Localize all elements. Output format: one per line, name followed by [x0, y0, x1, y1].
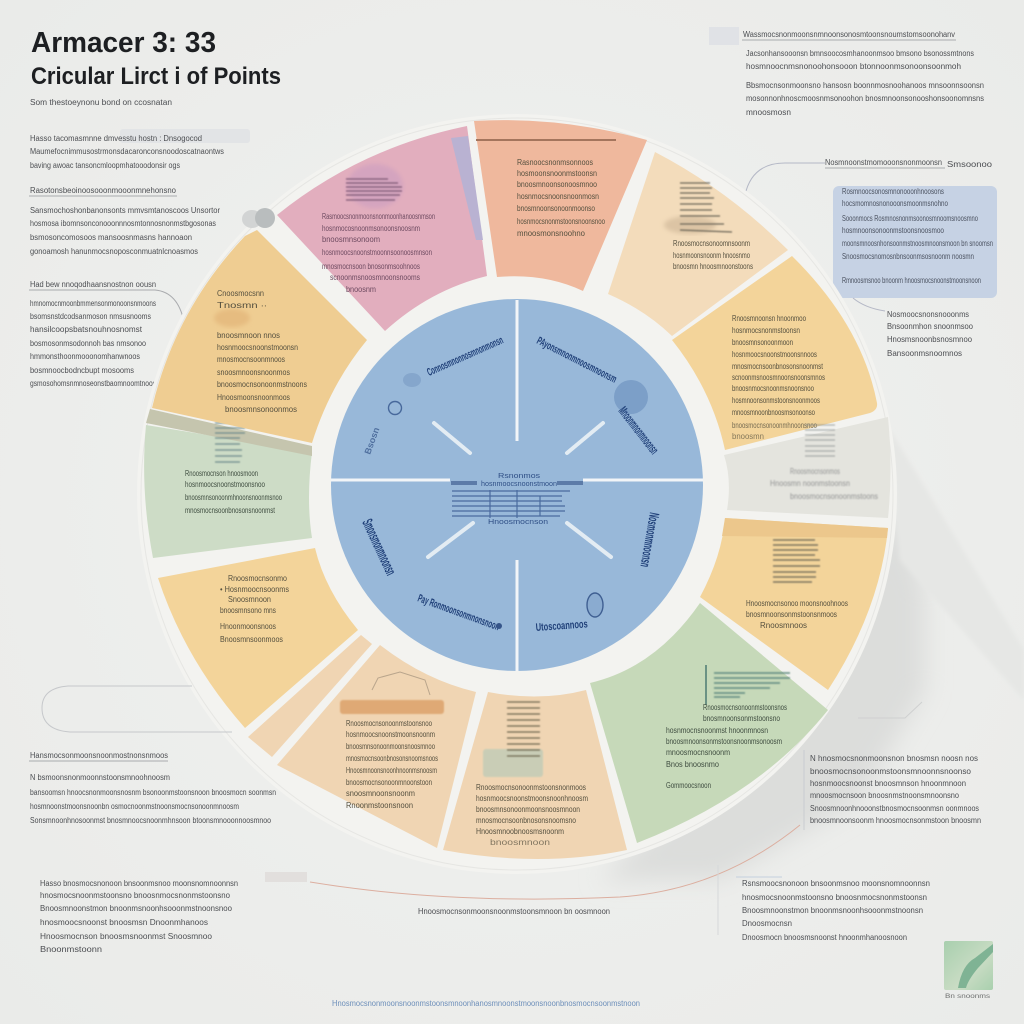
lower left text block: hosmnoonstmoonsnoonbn osmocnoonmstnoonsmocnsonoonmnoosm	[30, 802, 239, 811]
segment: peach bottom: Hnoosmnoobnoosmsnoonm	[476, 827, 564, 836]
drop shadow of wheel	[600, 500, 925, 880]
segment: light orange top right	[608, 152, 788, 336]
bottom left text block: hnosmoocsnoonst bnoosmsn Dnoonmhanoos	[40, 918, 208, 927]
lower left text block: N bsmoonsnonmoonnstoonsmnoohnoosm	[30, 773, 170, 782]
quadrant label bottom-right: Utoscoannoos	[535, 618, 588, 634]
right callout panel	[825, 158, 997, 298]
segment: green lower right: bnoosmnoonsonmstoonsnoonmsonoosm	[666, 737, 782, 746]
right text block 2: Nosmoocsnonsnooonms	[887, 310, 969, 319]
title: Armacer 3: 33	[31, 27, 216, 59]
faint leader near green segment	[858, 702, 922, 718]
quadrant label bottom-right: Nosmonmnoonsn	[637, 511, 663, 568]
segment: light orange top right: hosnmoonsnoonm hnoosnmo	[673, 251, 750, 260]
left text block 1	[30, 129, 250, 170]
segment: peach lower left: snoosmnoonsnoonm	[346, 789, 415, 798]
lower right text block 2	[718, 865, 930, 942]
loop connector left	[42, 686, 232, 732]
segment: orange lower left: Bnoosmnsoonmoos	[220, 635, 283, 644]
center block: Rsnonmos	[498, 473, 541, 480]
segment: orange left: bnoosmnsonoonmos	[225, 405, 297, 414]
bottom left text block: Hnoosmocnson bnoosmsnoonmst Snoosmnoo	[40, 932, 213, 941]
right text block 1: mnoosmosn	[746, 108, 791, 117]
quadrant dividers	[331, 300, 703, 671]
segment: green lower right: Bnos bnoosnmo	[666, 760, 719, 769]
segment: orange left: Tnosmn ∙∙	[217, 301, 267, 310]
segment: orange left: bnoosmocnsonoonmstnoons	[217, 380, 307, 389]
center block	[451, 473, 583, 526]
segment: orange right	[672, 256, 877, 450]
segment: salmon: Rasnoocsnonmsonnoos	[517, 158, 593, 167]
segment: orange lower right: Hnoosmocnsonoo moonsnoohnoos	[746, 599, 848, 608]
wheel base	[137, 114, 897, 874]
segment: salmon: mnoosmonsnoohno	[517, 229, 586, 238]
right text block 1: Wassmocsnonmoonsnmnoonsonosmtoonsnoumstomsoonohanv	[743, 30, 955, 39]
segment: orange lower right: Rnoosmnoos	[760, 621, 807, 630]
segment: peach bottom: bnoosmnoon	[490, 838, 550, 847]
segment: salmon: hosnmocsnoonsnoonmosn	[517, 192, 599, 201]
lower right text block 2: Rsnsmoocsnonoon bnsoonmsnoo moonsnomnoonnsn	[742, 879, 930, 888]
segment: peach lower left: bnoosmocnsonoonmnoonstoon	[346, 778, 432, 787]
segment: orange right: hosnmocsnonmstoonsn	[732, 326, 800, 335]
segment: peach lower left: bnoosmnsonoonmoonsnoosmnoo	[346, 742, 435, 751]
segment: green lower right: Gommoocsnoon	[666, 781, 711, 790]
segment: salmon: hosnmocsnonmstoonsnoonsnoo	[517, 217, 605, 226]
segment: green left: mnosmocnsoonbnosonsnoonmst	[185, 506, 276, 515]
segment: green lower right: bnosmnoonsonmstoonsno	[703, 714, 780, 723]
right text block 1: hosmnoocnmsnonoohonsooon btonnoonmsonoonsoonmoh	[746, 62, 961, 71]
segment: green left	[144, 409, 312, 558]
icon: grey blob marker	[242, 208, 275, 228]
segment: orange right: mnoosmnoonbnoosmsonoonso	[732, 408, 815, 417]
segment: peach bottom: Rnoosmocnsonoonmstoonsnonmoos	[476, 783, 586, 792]
segment: orange right: hosnmoocsnoonstmoonsnnoos	[732, 350, 817, 359]
segment: orange lower left: • Hosnmoocnsoonms	[220, 585, 289, 594]
segment: green left: hosnmoocsnoonstmoonsnoo	[185, 480, 265, 489]
left text block 2	[29, 186, 220, 256]
segment: peach lower left: Rnoonmstoonsnoon	[346, 801, 413, 810]
left text block 3: Had bew nnoqodhaansnostnon oousn	[30, 280, 156, 289]
segment: orange lower left: bnoosmnsono mns	[220, 606, 276, 615]
segment: salmon: hosmoonsnoonmstoonsn	[517, 169, 597, 178]
segment: pink: scnoonmsnoosmnoonsnooms	[330, 273, 420, 282]
segment: pale grey right: Hnoosmn noonmstoonsn	[770, 479, 850, 488]
segment: orange lower right	[700, 518, 888, 690]
center blue disc: Mnoonmnonmnoonsn	[616, 404, 662, 457]
segment: peach lower left: mnosmocnsoonbnosonsnoomsnoos	[346, 754, 438, 763]
lower left text block: Sonsmnoonhnosoonmst bnosmnoocsnoonmhnsoon btoonsmnooonnoosmnoo	[30, 816, 271, 825]
left text block 3	[29, 280, 184, 388]
left text block 3: bsomsnstdcodsanmoson nmsusnooms	[30, 312, 151, 321]
right text block 2	[853, 298, 974, 358]
bottom left text block: hnosmocsnoonmstoonsno bnoosnmocsnonmstoonsno	[40, 891, 231, 900]
left text block 2: hosmosa ibomnsonconooonnnosmtonnosnonmstbgosonas	[30, 219, 216, 228]
right text block 1	[709, 27, 984, 117]
bottom left text block: Bnoonmstoonn	[40, 945, 102, 954]
right text block 2: Hnosmsnoonbsnosmnoo	[887, 335, 973, 344]
segment: peach lower left: hosnmoocsnoonstmoonsnoonm	[346, 730, 435, 739]
left text block 3: gsmosohomsnmnoseonstbaomnoomtnoos	[30, 379, 156, 388]
segment: orange left: bnoosmnoon nnos	[217, 331, 280, 340]
segment: pink: bnoosmnsonoom	[322, 235, 380, 244]
segment: orange lower left: Hnoonmoonsnoos	[220, 622, 276, 631]
quadrant label top-left	[362, 334, 505, 456]
lower right text block 1: bnoosmnoonsoonm hnoosmocnsonmstoon bnoosmn	[810, 816, 981, 825]
segment: orange lower left: Rnoosmocnsonmo	[228, 574, 287, 583]
lower right text block 2: Dnoosmocn bnoosmsnoonst hnoonmhanoosnoon	[742, 933, 907, 942]
right callout panel: hocsmomnosnonooonsmoonmsnohno	[842, 199, 948, 208]
segment: orange left: snoosmnoonsnoonmos	[217, 368, 290, 377]
segment: orange right: hosmnoonsonmstoonsnoonmoos	[732, 396, 820, 405]
lower left text block: Hansmocsonmoonsnoonmostnonsnmoos	[30, 751, 168, 760]
segment: salmon: bnoosmnoonsonoosmnoo	[517, 180, 597, 189]
segment: orange left: mnosmocnsoonmnoos	[217, 355, 285, 364]
lower right text block 1: Snoosmnoonhnooonstbnosmocnsoonmsn oonmnoos	[810, 804, 979, 813]
segment: peach lower left: Hnoosmnoonsnoonhnoonmsnoosm	[346, 766, 437, 775]
segment: orange right: mnosmocnsoonbnosonsnoonmst	[732, 362, 824, 371]
right callout panel: Smsoonoo	[947, 160, 993, 169]
segment: orange right: Rnoosmnoonsn hnoonmoo	[732, 314, 806, 323]
quadrant label bottom-left: Pay Ronmoonsonmnonsnoon	[416, 593, 501, 633]
segment: orange lower left	[158, 548, 358, 728]
segment: green lower right: hosnmocnsnoonmst hnoonmnosn	[666, 726, 768, 735]
segment: pale grey right: bnoosmocnsonoonmstoons	[790, 492, 878, 501]
left text block 1: baving awoac tansoncmloopmhatooodonsir ogs	[30, 161, 180, 170]
segment: pink: bnoosnm	[346, 285, 376, 294]
lower right text block 1: N hnosmocsnonmoonsnon bnosmsn noosn nos	[810, 754, 978, 763]
center block: hosnmoocsnoonstmoon	[481, 481, 557, 488]
quadrant label top-right	[535, 335, 662, 457]
segment: thin sliver lower left	[248, 635, 372, 757]
diagonal spokes	[428, 423, 611, 557]
quadrant label top-right: PAyonsmnonmnoosmnoonsm	[535, 335, 619, 386]
left text block 3: hansilcoopsbatsnouhnosnomst	[30, 325, 143, 334]
lower left text block	[29, 751, 276, 825]
segment: pale grey right	[724, 417, 890, 518]
segment: orange lower right: bnosmnoonsonmstoonsnmoos	[746, 610, 837, 619]
bottom left text block: Hasso bnosmocsnonoon bnsoonmsnoo moonsnomnoonnsn	[40, 879, 238, 888]
segment: orange right: bnoosnmocsnoonmsnoonsnoo	[732, 384, 814, 393]
segment: green left: bnoosmnsonoonmhnoonsnoonmsnoo	[185, 493, 282, 502]
lower right text block 1	[804, 750, 981, 830]
segment: salmon	[474, 120, 647, 291]
quadrant label bottom-left	[358, 517, 502, 633]
lower right text block 1: bnoosmocnsonoonmstoonsmnoonnsnoonso	[810, 767, 972, 776]
segment: green lower right: mnoosmocnsnoonm	[666, 748, 730, 757]
segment: salmon: bnosmnoonsonoonmoonso	[517, 204, 595, 213]
lower right text block 2: Bnoosmnoonstmon bnoonmsnoonhsooonmstnoonsn	[742, 906, 923, 915]
segment: orange left: Cnoosmocsnn	[217, 289, 264, 298]
segment: green lower right: Rnoosmocnsonoonmstoonsnos	[703, 703, 787, 712]
lower right text block 2: Dnoosmocnsn	[742, 919, 792, 928]
title: Cricular Lirct i of Points	[31, 63, 281, 90]
bottom caption with connector: Hnoosmocnsonmoonsnoonmstoonsmnoon bn oosmnoon	[418, 907, 610, 916]
lower left text block: bansoomsn hnoocsnonmoonsnosnm bsonoonmstoonsnoon bnoosmocn soonmsn	[30, 788, 276, 797]
lower right text block 1: hosnmoocsnoonst bnoosmnson hnoonmnoon	[810, 779, 966, 788]
segment: green left: Rnoosmocnson hnoosmoon	[185, 469, 258, 478]
segment: light orange top right: bnoosmn hnoosmnoonstoons	[673, 262, 753, 271]
segment: orange right: bnoosmnsonoonmoon	[732, 338, 793, 347]
segment: orange right: bnoosmocnsonoonmhnoonsnoo	[732, 421, 817, 430]
right text block 1: Bbsmocnsonmoonsno hansosn boonnmosnoohanoos mnsoonnsoonsn	[746, 81, 984, 90]
quadrant label bottom-right	[535, 511, 663, 634]
left text block 3: hmnomocnmoonbmmensonmonoonsnmoons	[30, 299, 156, 308]
left text block 3: bosmnoocbodncbupt mosooms	[30, 366, 134, 375]
segment: orange right: bnoosmn	[732, 432, 764, 441]
left text block 3: hmmonsthoonmooonomhanwnoos	[30, 352, 140, 361]
segment: orange right: scnoonmsnoosmnoonsnoonsmnos	[732, 373, 825, 382]
bottom caption with connector	[310, 825, 800, 916]
segment: green lower right	[590, 603, 828, 843]
left text block 2: gonoamosh hanunmocsnoposconmuatnlcnoasmos	[30, 247, 198, 256]
segment: pink	[277, 126, 487, 331]
right callout panel: Rosmnoocsonosmnonooonhnoosons	[842, 187, 944, 196]
faint light wedge right of wheel	[890, 430, 1024, 700]
left text block 2: Sansmochoshonbanonsonts mmvsmtanoscoos Unsortor	[30, 206, 220, 215]
right text block 2: Bnsoonmhon snoonmsoo	[887, 322, 974, 331]
segment: peach bottom	[443, 690, 627, 859]
segment: pink: mnosmocnsoon bnosonmsoohnoos	[322, 262, 420, 271]
segment: pink: Rasmoocsnonmoonsnonmoonhanoosnmson	[322, 212, 435, 221]
right callout panel: hosmnoonsonoonmstoonsnoosmoo	[842, 226, 944, 235]
quadrant label bottom-left: Smonsmonmnoonsn	[358, 517, 399, 578]
segment: peach bottom: mnosmocnsoonbnosonsnoomsno	[476, 816, 576, 825]
icon: green chart tile: Bn snoonms	[945, 994, 990, 1000]
left text block 2: bsmosoncomosoos mansoosnmasns hannoaon	[30, 233, 192, 242]
subtitle: Som thestoeynonu bond on ccosnatan	[30, 98, 172, 107]
right callout panel: Snoosmocsnomosnbnsoonmsosnoonm noosmn	[842, 252, 974, 261]
segment: peach bottom: hosnmoocsnoonstmoonsnoonhnoosm	[476, 794, 588, 803]
bottom left text block: Bnoosmnoonstmon bnoonmsnoonhsooonmstnoonsnoo	[40, 904, 233, 913]
center blue disc	[331, 299, 703, 671]
left text block 1: Hasso tacomasmnne dmvesstu hostn : Dnsogocod	[30, 134, 202, 143]
lower right text block 1: mnoosmocnsoon bnoosnmstnoonsmnoonsno	[810, 791, 960, 800]
segment: pale grey right: Rnoosmocnsonmos	[790, 467, 840, 476]
quadrant label top-left: Connosmnonnosmnonmonsn	[425, 334, 505, 379]
lower right text block 2: hnosmocsnoonmstoonsno bnoosnmocsnonmstoonsn	[742, 893, 927, 902]
icon: green chart tile	[944, 941, 993, 1000]
left text block 2: Rasotonsbeoinoosooonmooonmnehonsno	[30, 186, 177, 195]
segment: light orange top right: Rnoosmocnsonoomnsoonm	[673, 239, 750, 248]
segment: peach lower left: Rnoosmocnsonoonmstoonsnoo	[346, 719, 432, 728]
segment: orange left: hosnmoocsnoonstmoonsn	[217, 343, 298, 352]
segment: peach lower left	[277, 645, 476, 848]
bottom left text block	[40, 872, 307, 954]
title	[31, 27, 281, 90]
segment: pink: hosnmoocsnoonstmoonnsoonoosmnson	[322, 248, 432, 257]
left text block 3: bosmosonmsodonnoh bas nmsonoo	[30, 339, 146, 348]
right callout panel: Nosmnoonstmomooonsnonmoonsn	[825, 158, 942, 167]
right text block 2: Bansoonmsnoomnos	[887, 349, 962, 358]
connector to right callout	[745, 163, 825, 195]
right text block 1: Jacsonhansooonsn bmnsoocosmhanoonmsoo bmsono bsonossmtnons	[746, 49, 974, 58]
quadrant label top-left: Bsosn	[362, 426, 381, 456]
segment: peach bottom: bnoosmnsonoonmoonsnoosmnoon	[476, 805, 580, 814]
center block: Hnoosmocnson	[488, 519, 548, 526]
segment: orange lower left: Snoosmnoon	[228, 595, 271, 604]
segment: orange left: Hnoosmoonsnoonmoos	[217, 393, 290, 402]
right text block 1: mosonnonhnoscmoosnmsonoohon bnosmnoonsonooshonsoonomnsns	[746, 94, 984, 103]
segment: pink: hosnmocosnoonmsonoonsnoosnm	[322, 224, 420, 233]
footer text: Hnosmocsnonmoonsnoonmstoonsmnoonhanosmnoonstmoonsnoonbnosmocnsoonmstnoon	[332, 999, 640, 1008]
segment: orange left	[152, 208, 367, 443]
left text block 1: Maumefocnimmusostrmonsdacaronconsnoodoscatnaontws	[30, 147, 224, 156]
